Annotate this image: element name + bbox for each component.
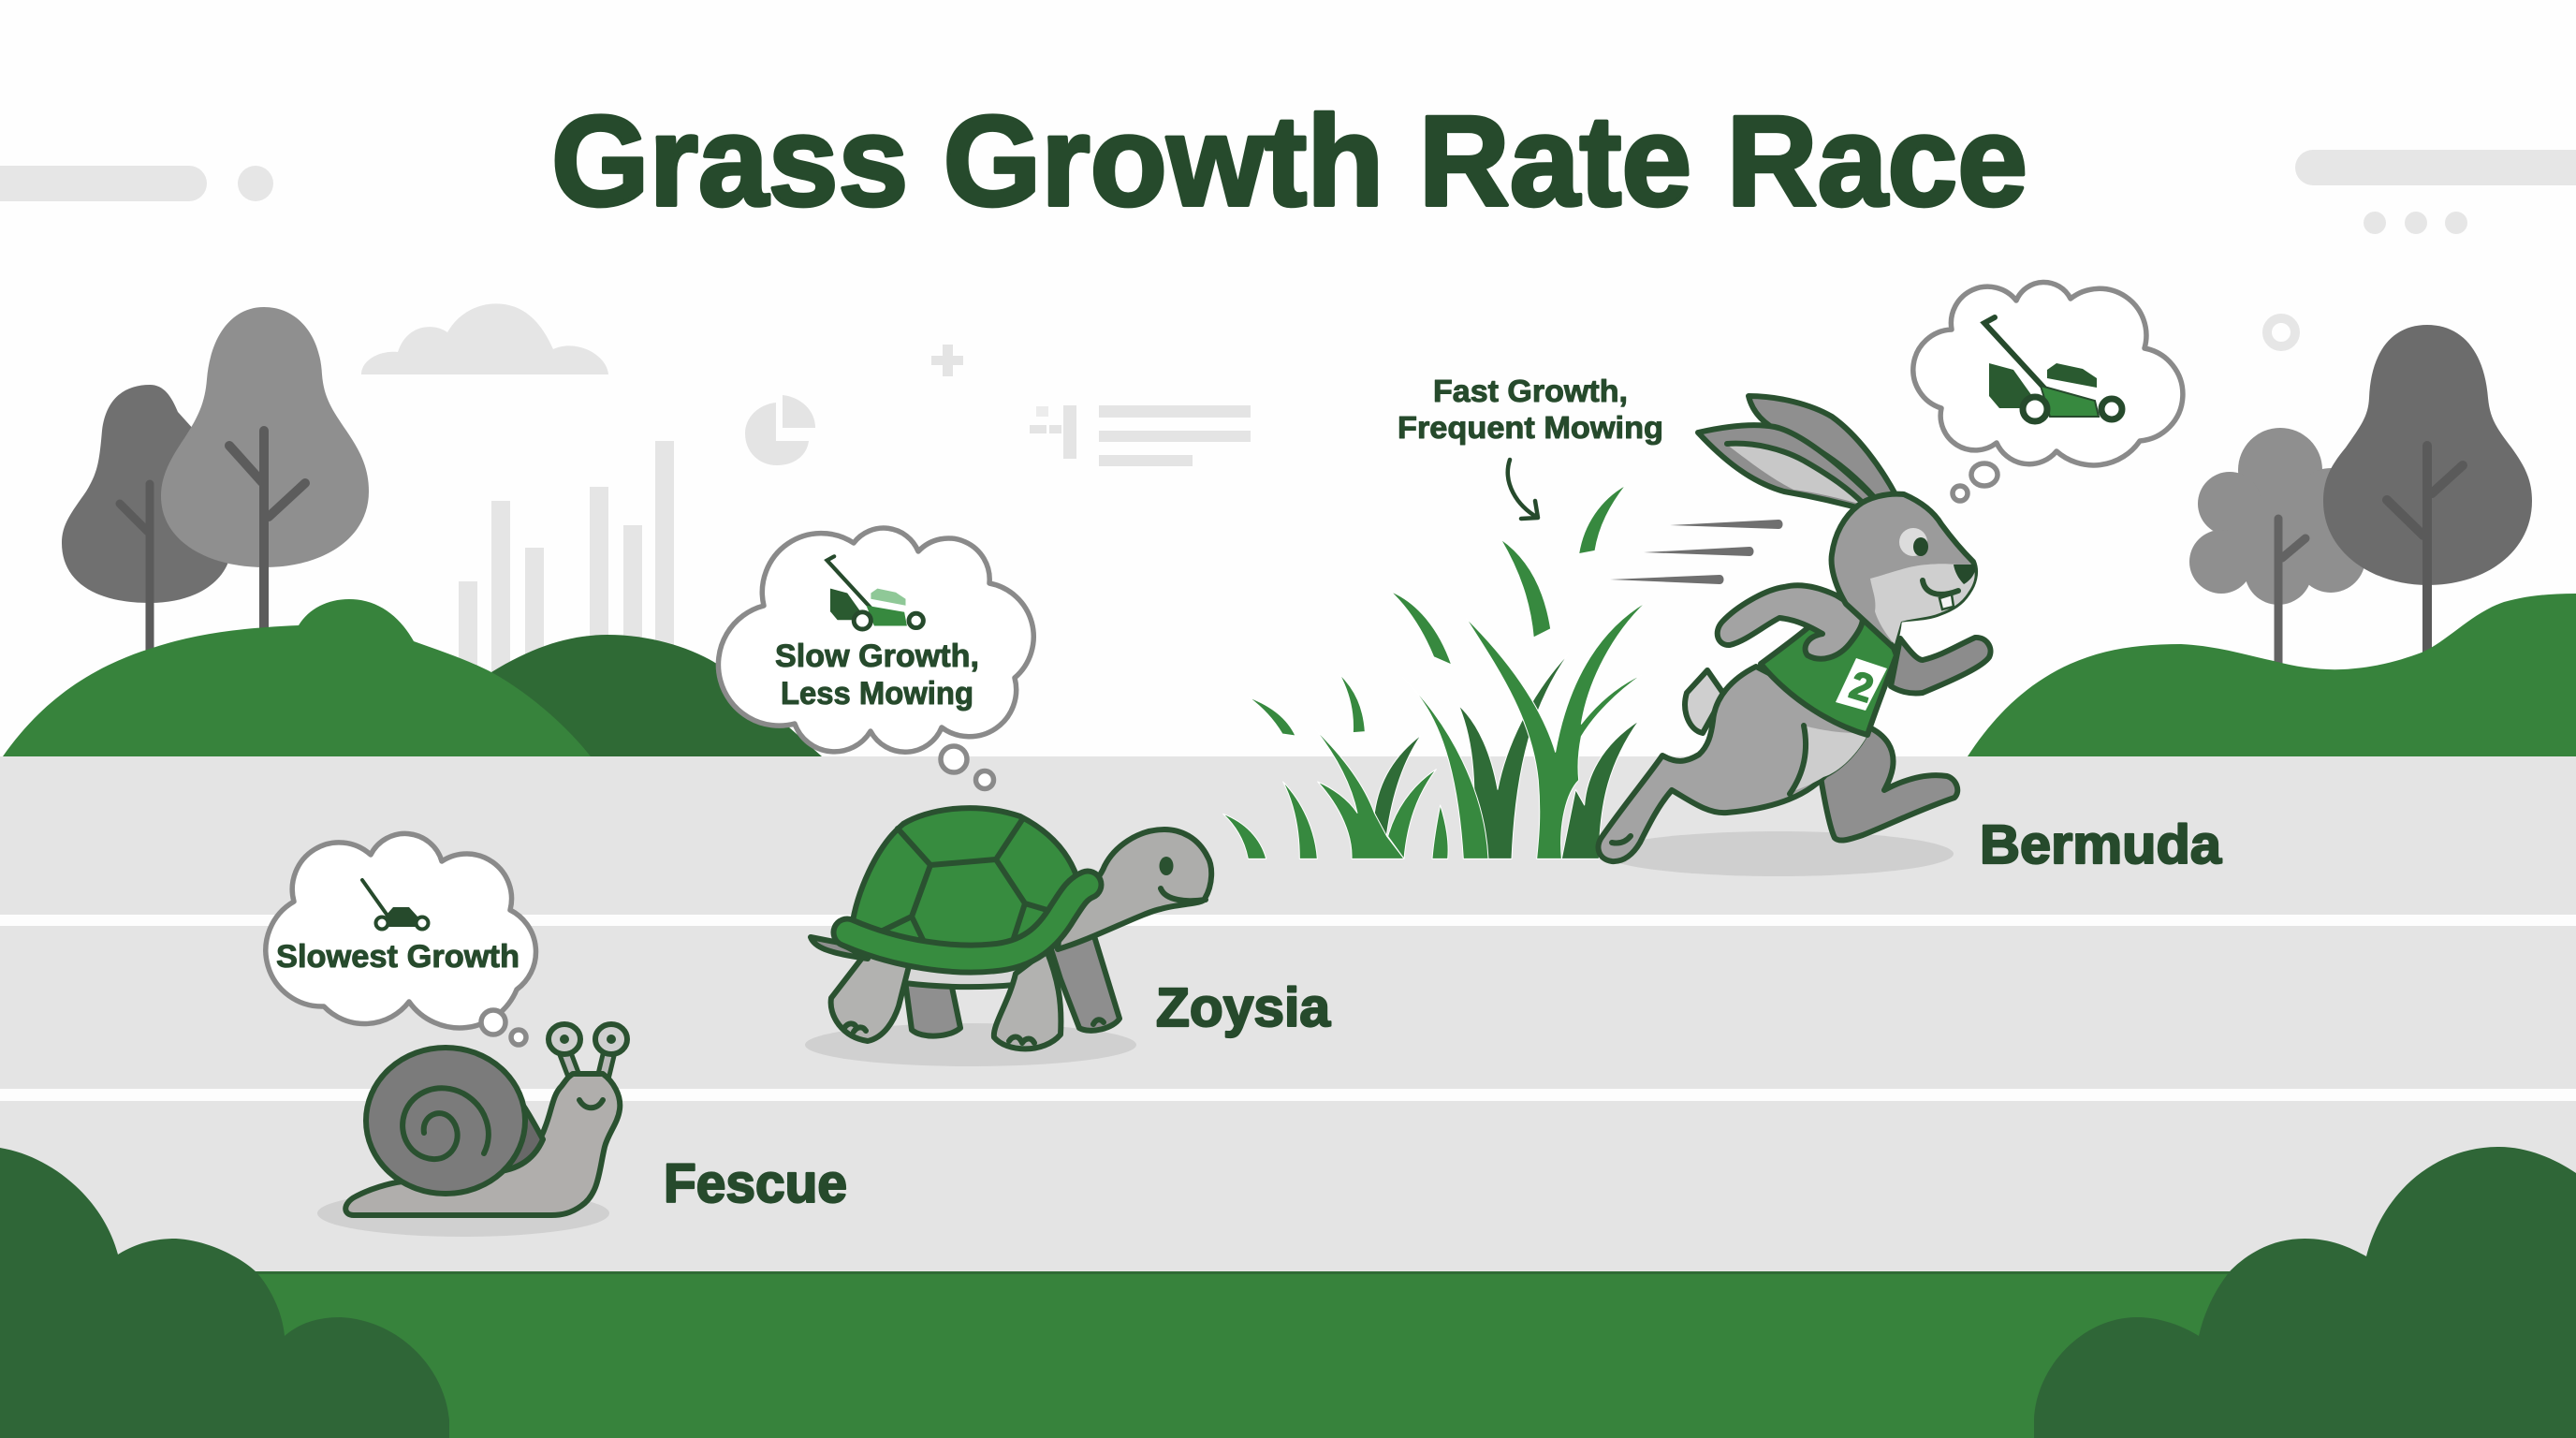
rabbit	[1598, 396, 1991, 876]
race track	[0, 756, 2576, 1273]
background decor: list lines	[1030, 405, 1251, 466]
icon: mower	[1984, 317, 2122, 421]
annotation: fast growth frequent mowing: Fast Growth,	[1433, 374, 1628, 408]
left trees	[62, 307, 369, 655]
hills right	[1968, 594, 2576, 756]
grass tuft and flying blades	[1223, 485, 1646, 858]
background decor: pie chart	[745, 395, 815, 465]
bush left	[0, 1148, 449, 1438]
thought bubble: slow growth	[718, 528, 1033, 788]
background decor: plus sign	[931, 345, 963, 376]
annotation: fast growth frequent mowing	[1398, 374, 1663, 445]
text: slowest growth: Slowest Growth	[276, 939, 520, 975]
right trees	[2189, 325, 2532, 669]
icon: small mower	[362, 880, 429, 929]
text: slow growth less mowing: Less Mowing	[781, 676, 973, 712]
background decor: bar chart	[459, 441, 674, 679]
label: fescue: Fescue	[664, 1153, 847, 1214]
green foreground	[0, 1271, 2576, 1438]
snail	[317, 1024, 627, 1237]
hills left	[3, 599, 822, 756]
label: bermuda: Bermuda	[1980, 814, 2222, 875]
motion lines	[1610, 520, 1782, 584]
thought bubble: lawn mower	[1913, 282, 2183, 501]
bib number: 2	[1845, 663, 1879, 711]
tortoise	[805, 808, 1211, 1066]
background decor: cloud	[361, 303, 608, 374]
text: slow growth less mowing	[775, 638, 979, 712]
text: slow growth less mowing: Slow Growth,	[775, 638, 979, 674]
thought bubble: slowest growth	[266, 833, 535, 1045]
background decor: pill and dots	[0, 150, 2576, 346]
title: Grass Growth Rate Race	[551, 90, 2027, 233]
icon: mower	[827, 556, 923, 629]
arrow: annotation to grass	[1508, 460, 1538, 519]
label: zoysia: Zoysia	[1156, 977, 1331, 1038]
bush right	[2034, 1147, 2576, 1438]
annotation: fast growth frequent mowing: Frequent Mowing	[1398, 410, 1663, 445]
